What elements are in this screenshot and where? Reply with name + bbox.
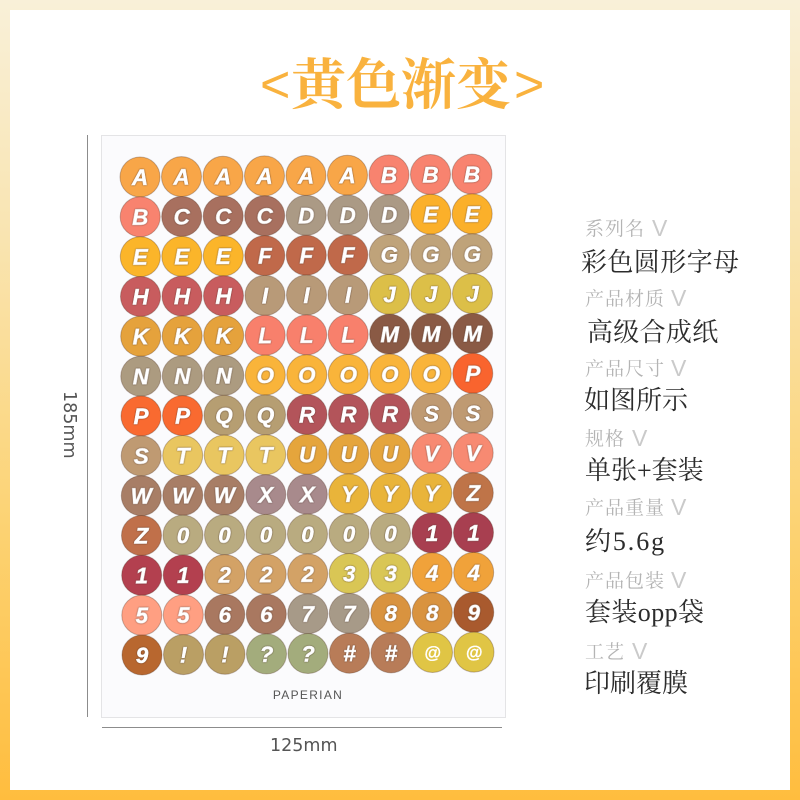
sticker row 9: W to Z: W bbox=[131, 484, 154, 509]
sticker row 7: P to S: P bbox=[133, 404, 150, 429]
sticker row 12: 5 to 9 bbox=[122, 592, 494, 635]
spec: size: V bbox=[671, 355, 687, 381]
sticker row 4: H to J: J bbox=[466, 282, 479, 307]
sticker row 10: Z, 0, 1: 1 bbox=[426, 521, 438, 546]
height label 185mm: 185mm bbox=[59, 391, 79, 458]
sticker row 1: A to B bbox=[120, 154, 492, 197]
sticker row 9: W to Z: W bbox=[172, 483, 195, 508]
sticker row 13: 9 and symbols: ! bbox=[180, 643, 188, 668]
spec: craft bbox=[584, 638, 688, 698]
sticker row 5: K to M bbox=[121, 313, 493, 356]
sticker row 4: H to J: I bbox=[262, 283, 269, 308]
sticker row 12: 5 to 9: 5 bbox=[177, 603, 190, 628]
sticker row 13: 9 and symbols: # bbox=[343, 641, 356, 666]
sticker row 4: H to J: J bbox=[425, 282, 438, 307]
sticker row 3: E to G: E bbox=[133, 245, 149, 270]
sticker row 4: H to J: J bbox=[383, 282, 396, 307]
sticker row 10: Z, 0, 1 bbox=[121, 512, 494, 556]
sticker row 13: 9 and symbols: 9 bbox=[136, 643, 149, 668]
sticker row 9: W to Z: X bbox=[298, 482, 317, 507]
sticker row 5: K to M: K bbox=[132, 324, 151, 349]
sticker row 2: B to E: D bbox=[298, 203, 314, 228]
sticker row 6: N to P: N bbox=[216, 363, 233, 389]
sticker row 7: P to S: S bbox=[465, 401, 481, 426]
sticker row 12: 5 to 9: 8 bbox=[426, 601, 439, 626]
spec: packaging bbox=[585, 567, 704, 627]
sticker row 6: N to P: O bbox=[339, 362, 358, 387]
sticker row 12: 5 to 9: 8 bbox=[384, 601, 398, 626]
sticker row 12: 5 to 9: 6 bbox=[218, 602, 232, 628]
width label 125mm: 125mm bbox=[270, 736, 338, 756]
sticker row 4: H to J: I bbox=[303, 283, 310, 308]
panel: sticker sheet bbox=[102, 136, 506, 718]
sticker row 3: E to G: G bbox=[422, 242, 440, 267]
title: < bbox=[260, 56, 290, 114]
sticker row 6: N to P: P bbox=[465, 361, 481, 386]
spec: material bbox=[585, 285, 719, 347]
sticker row 2: B to E: E bbox=[465, 202, 481, 227]
sticker row 8: S to V: T bbox=[176, 443, 192, 468]
spec: material: 产品材质 bbox=[585, 288, 665, 310]
height dimension line bbox=[86, 135, 88, 717]
sticker row 3: E to G: G bbox=[380, 242, 398, 268]
sticker row 10: Z, 0, 1: 0 bbox=[218, 523, 231, 548]
sticker row 2: B to E: C bbox=[173, 204, 191, 230]
sticker row 10: Z, 0, 1: 0 bbox=[384, 521, 397, 546]
sticker row 11: 1 to 4: 2 bbox=[259, 562, 273, 587]
sticker row 2: B to E: D bbox=[339, 203, 356, 228]
sticker row 8: S to V: T bbox=[217, 443, 233, 468]
sticker row 2: B to E: B bbox=[132, 205, 148, 230]
sticker row 11: 1 to 4: 3 bbox=[384, 561, 398, 586]
sticker row 9: W to Z: Y bbox=[341, 482, 358, 507]
sticker row 1: A to B: A bbox=[131, 165, 148, 190]
sticker row 1: A to B: B bbox=[381, 163, 397, 188]
sticker row 13: 9 and symbols: # bbox=[385, 641, 398, 666]
sticker row 11: 1 to 4: 4 bbox=[466, 560, 481, 585]
sticker row 2: B to E bbox=[120, 194, 492, 237]
sticker row 10: Z, 0, 1: 0 bbox=[301, 522, 314, 547]
spec: weight: 约5.6g bbox=[585, 527, 666, 556]
sticker row 9: W to Z: Z bbox=[465, 481, 482, 506]
spec: series name: 系列名 bbox=[585, 218, 645, 240]
sticker row 12: 5 to 9: 9 bbox=[467, 600, 481, 625]
sticker row 1: A to B: A bbox=[255, 164, 273, 189]
sticker row 4: H to J: H bbox=[215, 284, 232, 309]
sticker row 1: A to B: A bbox=[297, 163, 314, 189]
spec: format: 规格 bbox=[585, 428, 625, 450]
spec: size bbox=[584, 355, 689, 415]
sticker row 7: P to S: Q bbox=[257, 403, 275, 428]
sticker row 11: 1 to 4: 3 bbox=[343, 561, 356, 587]
sticker row 12: 5 to 9: 7 bbox=[343, 601, 357, 626]
sticker row 7: P to S: Q bbox=[215, 403, 233, 428]
sticker row 6: N to P: N bbox=[133, 364, 150, 389]
sticker row 13: 9 and symbols bbox=[122, 632, 494, 675]
sticker row 3: E to G: F bbox=[258, 244, 273, 269]
sticker row 8: S to V: V bbox=[466, 441, 483, 466]
spec: format bbox=[585, 425, 704, 485]
sticker row 5: K to M: K bbox=[174, 324, 192, 349]
sticker row 5: K to M: M bbox=[463, 321, 483, 346]
sticker row 6: N to P: O bbox=[298, 363, 316, 388]
sticker row 13: 9 and symbols: @ bbox=[424, 643, 441, 663]
sticker row 12: 5 to 9: 7 bbox=[301, 602, 316, 627]
sticker row 8: S to V: T bbox=[259, 443, 275, 468]
sticker row 8: S to V: S bbox=[134, 444, 149, 469]
sticker row 11: 1 to 4 bbox=[122, 552, 494, 595]
spec: weight: V bbox=[671, 494, 687, 520]
sticker row 9: W to Z: W bbox=[214, 483, 237, 508]
sticker row 9: W to Z: Y bbox=[383, 481, 400, 507]
sticker row 12: 5 to 9: 6 bbox=[260, 602, 273, 627]
sticker row 8: S to V: V bbox=[424, 441, 441, 466]
sticker row 11: 1 to 4: 2 bbox=[217, 563, 232, 588]
spec: series name: 彩色圆形字母 bbox=[581, 248, 739, 277]
sticker row 4: H to J: H bbox=[132, 284, 149, 310]
spec: craft: V bbox=[632, 638, 648, 664]
sticker row 11: 1 to 4: 1 bbox=[135, 563, 148, 588]
sticker row 13: 9 and symbols: @ bbox=[466, 643, 482, 662]
sticker row 10: Z, 0, 1: Z bbox=[134, 523, 150, 549]
sticker row 3: E to G bbox=[120, 234, 492, 277]
spec: weight: 产品重量 bbox=[585, 497, 665, 519]
sticker row 13: 9 and symbols: ? bbox=[301, 641, 315, 667]
sticker row 6: N to P: N bbox=[174, 364, 191, 389]
sticker row 9: W to Z bbox=[121, 473, 493, 516]
sticker row 1: A to B: A bbox=[172, 165, 190, 190]
sticker row 5: K to M: L bbox=[300, 323, 314, 348]
sticker row 8: S to V bbox=[121, 433, 493, 476]
sticker row 5: K to M: L bbox=[341, 322, 355, 348]
sticker row 11: 1 to 4: 2 bbox=[300, 562, 315, 587]
sticker row 4: H to J: I bbox=[345, 283, 352, 308]
spec: material: V bbox=[671, 285, 687, 311]
sticker row 10: Z, 0, 1: 0 bbox=[177, 523, 190, 548]
sticker row 3: E to G: F bbox=[299, 243, 315, 268]
sticker row 1: A to B: A bbox=[214, 164, 231, 189]
sticker row 7: P to S: P bbox=[175, 404, 191, 429]
sticker row 5: K to M: M bbox=[380, 322, 400, 347]
title: > bbox=[514, 56, 544, 114]
brand label PAPERIAN: PAPERIAN bbox=[273, 688, 343, 702]
sticker row 13: 9 and symbols: ! bbox=[221, 642, 229, 667]
sticker row 10: Z, 0, 1: 0 bbox=[343, 522, 356, 547]
sticker row 1: A to B: B bbox=[422, 162, 439, 188]
sticker row 8: S to V: U bbox=[382, 442, 399, 467]
sticker row 2: B to E: C bbox=[256, 204, 274, 229]
sticker row 4: H to J: H bbox=[174, 284, 191, 309]
sticker row 11: 1 to 4: 4 bbox=[425, 561, 439, 586]
spec: weight bbox=[585, 494, 687, 556]
spec: format: 单张+套装 bbox=[585, 456, 704, 485]
spec: packaging: V bbox=[671, 567, 687, 593]
sticker row 7: P to S: R bbox=[340, 402, 357, 427]
sticker row 7: P to S bbox=[121, 393, 493, 436]
spec: material: 高级合成纸 bbox=[587, 318, 719, 347]
sticker row 9: W to Z: X bbox=[256, 483, 275, 508]
sticker row 9: W to Z: Y bbox=[424, 481, 441, 506]
sticker row 8: S to V: U bbox=[340, 442, 358, 467]
sticker row 6: N to P: O bbox=[381, 362, 399, 387]
sticker row 5: K to M: M bbox=[422, 322, 442, 347]
sticker row 5: K to M: K bbox=[215, 323, 234, 349]
spec: packaging: 套装opp袋 bbox=[585, 598, 704, 627]
sticker row 12: 5 to 9: 5 bbox=[135, 603, 149, 628]
spec: series name: V bbox=[652, 215, 668, 241]
sticker row 3: E to G: E bbox=[174, 244, 190, 269]
sticker row 8: S to V: U bbox=[299, 442, 316, 467]
width dimension line bbox=[102, 726, 502, 728]
title: 黄色渐变 bbox=[291, 55, 513, 116]
sticker row 1: A to B: A bbox=[338, 163, 356, 188]
spec: craft: 印刷覆膜 bbox=[584, 669, 688, 698]
sticker row 11: 1 to 4: 1 bbox=[177, 563, 190, 588]
sticker row 2: B to E: E bbox=[423, 202, 439, 227]
sticker row 4: H to J bbox=[120, 273, 493, 317]
spec: craft: 工艺 bbox=[585, 641, 625, 663]
sticker row 3: E to G: F bbox=[341, 243, 356, 268]
spec: size: 如图所示 bbox=[584, 386, 689, 415]
spec: format: V bbox=[632, 425, 648, 451]
sticker row 2: B to E: C bbox=[215, 204, 232, 229]
sticker row 3: E to G: G bbox=[463, 242, 481, 267]
sticker row 1: A to B: B bbox=[464, 162, 480, 187]
spec: size: 产品尺寸 bbox=[585, 358, 665, 380]
sticker row 7: P to S: R bbox=[299, 402, 316, 428]
sticker row 5: K to M: L bbox=[258, 323, 272, 348]
sticker row 10: Z, 0, 1: 1 bbox=[467, 521, 480, 546]
spec: series name bbox=[581, 215, 739, 277]
sticker row 6: N to P bbox=[121, 353, 493, 396]
spec: packaging: 产品包装 bbox=[585, 570, 665, 592]
sticker row 13: 9 and symbols: ? bbox=[260, 642, 274, 667]
sticker row 10: Z, 0, 1: 0 bbox=[260, 522, 273, 547]
sticker row 3: E to G: E bbox=[216, 244, 232, 269]
sticker row 2: B to E: D bbox=[381, 203, 397, 228]
sticker row 7: P to S: R bbox=[382, 402, 399, 427]
sticker row 7: P to S: S bbox=[424, 401, 439, 427]
sticker row 6: N to P: O bbox=[256, 363, 275, 388]
sticker row 6: N to P: O bbox=[422, 362, 441, 387]
